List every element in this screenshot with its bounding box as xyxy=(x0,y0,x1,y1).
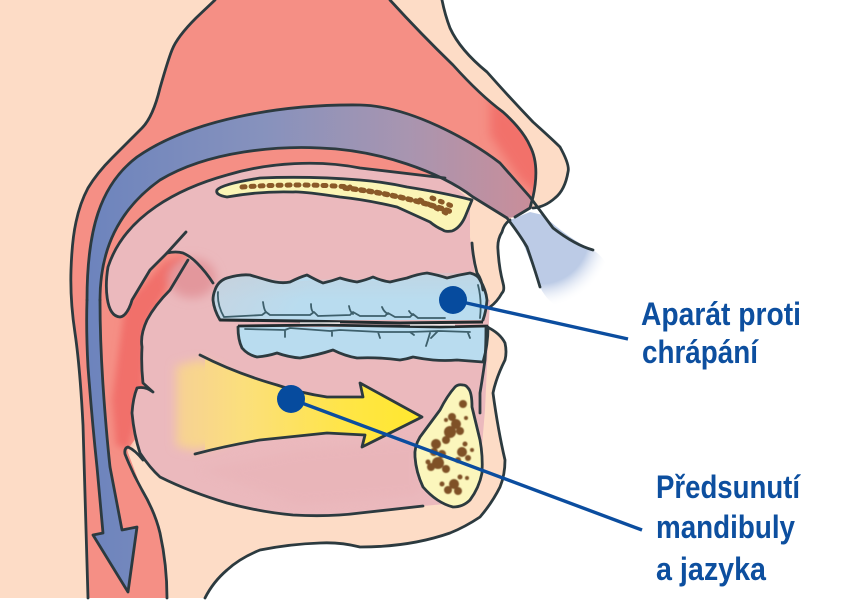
airway band inner line xyxy=(100,148,540,300)
palate line and uvula xyxy=(106,163,445,317)
label: advancement: mandibuly xyxy=(656,509,795,545)
exhaled air plume under nose xyxy=(510,212,608,307)
bright red shading in nose xyxy=(487,102,534,193)
pink tongue and floor of mouth xyxy=(132,260,490,516)
upper anti-snoring splint xyxy=(213,273,487,320)
blue airflow arrow along airway xyxy=(87,105,533,592)
label: appliance xyxy=(641,296,801,370)
back of head and nasal outline xyxy=(71,0,215,598)
label: advancement: a jazyka xyxy=(656,551,766,587)
blue arrow head and shaft xyxy=(87,300,137,592)
label: appliance: chrápání xyxy=(642,334,759,370)
tongue back xyxy=(132,260,423,516)
mid-mouth shading xyxy=(200,440,420,505)
soft palate to splint xyxy=(167,252,213,283)
label: advancement: Předsunutí xyxy=(656,469,801,505)
lower anti-snoring splint xyxy=(238,327,488,362)
upper lip outer xyxy=(490,220,510,307)
lower jaw bone xyxy=(415,385,482,507)
upper palate bone xyxy=(217,177,472,231)
leader: mandible and tongue advancement xyxy=(277,385,642,530)
glow near soft palate xyxy=(168,258,216,298)
red airway and nasal cavity xyxy=(71,0,536,598)
face and neck skin xyxy=(0,0,568,598)
nasal cavity line xyxy=(390,0,536,217)
upper lip inner xyxy=(472,243,483,290)
lower lip inner xyxy=(480,328,486,413)
nose profile xyxy=(442,0,568,208)
epiglottis xyxy=(125,447,167,598)
occlusal double line between splints xyxy=(220,320,488,327)
label: appliance: Aparát proti xyxy=(641,296,801,332)
bright red shading in throat xyxy=(112,254,186,450)
airway band outer line xyxy=(87,105,593,300)
anatomical outlines xyxy=(71,0,593,598)
yellow mandibular advancement arrow xyxy=(176,355,422,454)
label: advancement xyxy=(656,469,801,587)
lower lip outer and chin xyxy=(205,327,506,598)
pink soft palate and uvula xyxy=(106,163,478,317)
leader: appliance xyxy=(439,286,628,339)
